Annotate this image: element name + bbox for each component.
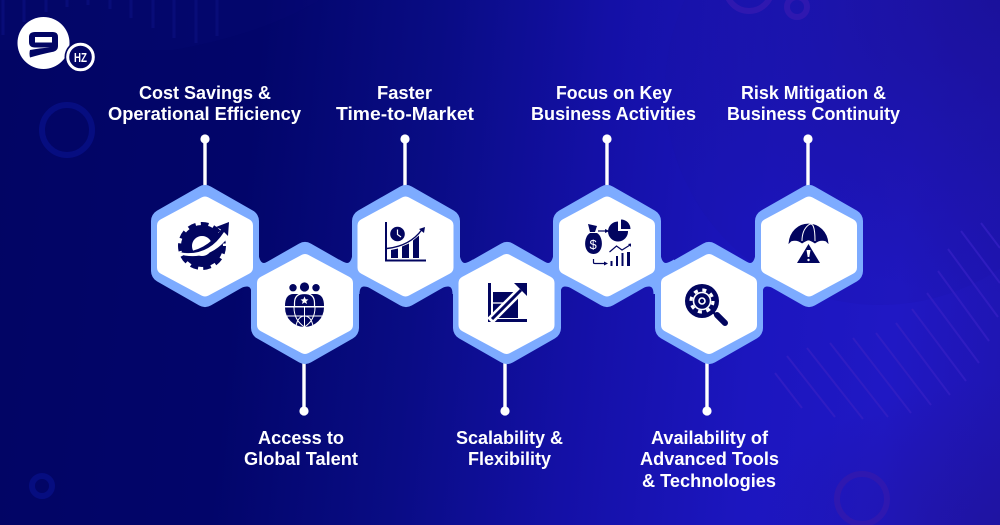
label: scalability and flexibility: Scalability & — [456, 428, 563, 448]
label: advanced tools: Availability of — [651, 428, 769, 448]
label: risk mitigation — [727, 83, 900, 124]
label: access to global talent: Global Talent — [244, 449, 358, 469]
label: focus on key activities: Focus on Key — [556, 83, 672, 103]
logo — [18, 17, 96, 73]
hexagon chain outer frame — [163, 197, 851, 352]
label: cost savings: Cost Savings & — [139, 83, 271, 103]
label: scalability and flexibility — [456, 428, 563, 469]
icon: magnifier with gear — [685, 284, 725, 323]
decorative ring top — [726, 0, 772, 11]
label: access to global talent: Access to — [258, 428, 344, 448]
label: access to global talent — [244, 428, 358, 469]
hexagon white faces — [164, 204, 850, 347]
label: faster time to market: Faster — [377, 83, 432, 103]
icon: money bag, pie and bars — [585, 220, 631, 266]
label: focus on key activities: Business Activities — [531, 104, 696, 124]
connector lines and dots — [200, 134, 813, 416]
hexagon notch fillets — [236, 250, 778, 294]
icon: gear with arrow — [178, 222, 230, 268]
label: risk mitigation: Business Continuity — [727, 104, 900, 124]
decorative small ring top — [787, 0, 807, 17]
label: faster time to market: Time-to-Market — [336, 104, 474, 124]
label: focus on key activities — [531, 83, 696, 124]
icon: money bag, pie and bars: $ — [590, 237, 598, 252]
label: cost savings: Operational Efficiency — [108, 104, 301, 124]
decorative ring bottom — [837, 474, 887, 524]
label: risk mitigation: Risk Mitigation & — [741, 83, 886, 103]
label: cost savings — [108, 83, 301, 124]
decorative stripes top left — [3, 0, 217, 43]
decorative ring left — [42, 105, 92, 155]
label: faster time to market — [336, 83, 474, 124]
label: advanced tools — [640, 428, 779, 491]
label: advanced tools: Advanced Tools — [640, 449, 779, 469]
decorative ring bottom left — [32, 476, 52, 496]
decorative stripes bottom right — [775, 223, 1000, 419]
label: advanced tools: & Technologies — [642, 471, 776, 491]
icon: global talent — [285, 282, 324, 327]
icon: scalability chart — [488, 283, 527, 322]
logo: HZ — [74, 50, 87, 65]
icon: umbrella with warning — [789, 224, 828, 263]
icon: clock and rising chart — [385, 222, 426, 262]
label: scalability and flexibility: Flexibility — [468, 449, 551, 469]
